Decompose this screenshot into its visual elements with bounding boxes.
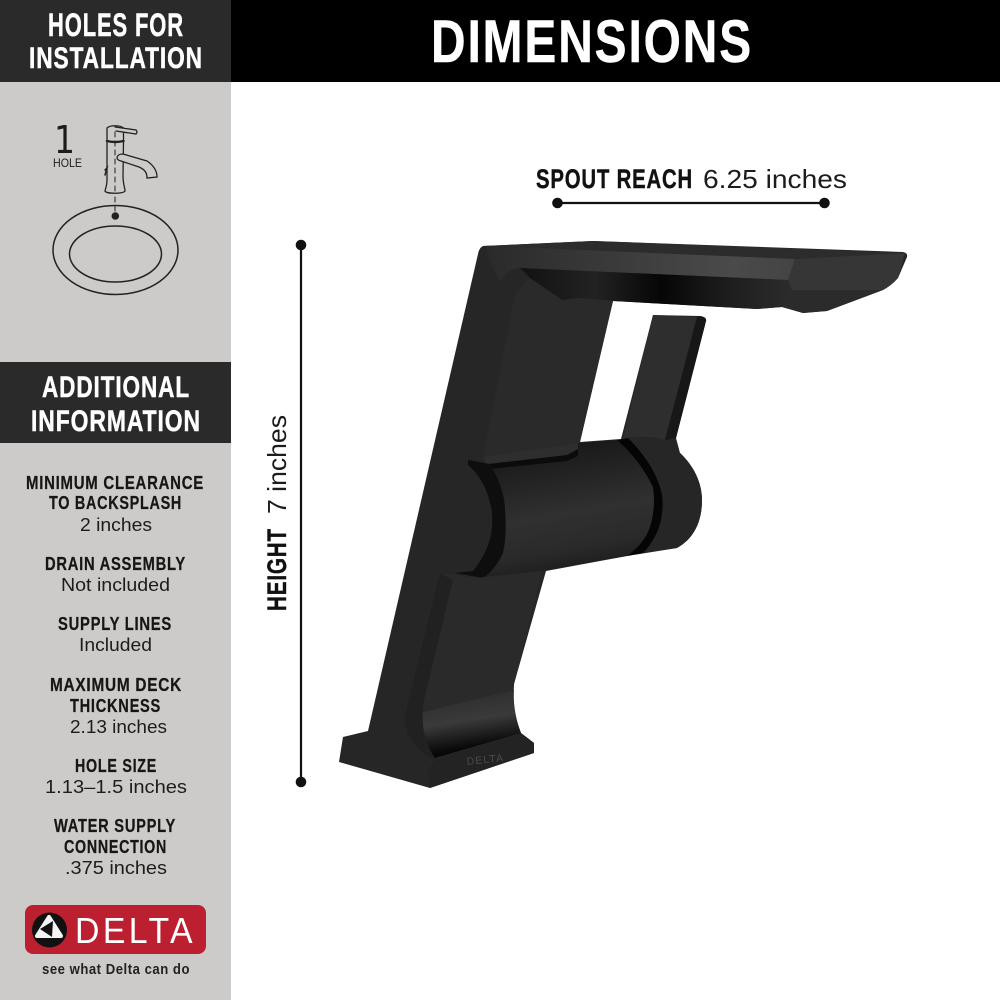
spec: maximum deck thickness (50, 675, 182, 737)
mixer body (483, 440, 654, 578)
spec: minimum clearance (26, 473, 204, 535)
mounting hole (112, 212, 119, 220)
spec: hole size: HOLE SIZE (75, 756, 157, 776)
logo: Delta: see what Delta can do (42, 961, 190, 978)
spec: hole size (45, 756, 187, 797)
dimension: height (262, 240, 306, 787)
height arrow (296, 240, 306, 787)
lever (623, 315, 697, 440)
faucet product image (339, 241, 907, 788)
spec: water supply connection: WATER SUPPLY (54, 816, 176, 836)
heading: additional information (0, 362, 231, 443)
dimension: height: 7 inches (262, 415, 292, 514)
base plate front (428, 733, 534, 788)
base logo: DELTA (466, 752, 505, 768)
spec: drain assembly: Not included (61, 575, 170, 595)
dimension: spout reach (536, 164, 847, 208)
lower column panel (405, 571, 542, 735)
faucet line drawing (105, 126, 157, 212)
logo: Delta: DELTA (75, 910, 196, 951)
spout end face (788, 253, 905, 290)
base recess (423, 690, 521, 758)
panel ledge (483, 443, 578, 470)
logo mark (32, 912, 67, 948)
heading: holes for installation: INSTALLATION (29, 42, 203, 75)
heading: additional information: ADDITIONAL (42, 371, 190, 404)
logo: Delta (25, 905, 206, 978)
title: DIMENSIONS (431, 8, 753, 75)
heading: holes for installation (0, 0, 231, 82)
hole count: 1 (54, 118, 75, 162)
dimension: height: HEIGHT (262, 528, 292, 611)
spec: supply lines: Included (79, 635, 152, 655)
dimension: spout reach: 6.25 inches (703, 164, 847, 194)
sink outline (53, 206, 178, 294)
spec: minimum clearance: 2 inches (80, 515, 152, 535)
spout front strip (486, 246, 795, 282)
spec: maximum deck thickness: MAXIMUM DECK (50, 675, 182, 695)
body collar (455, 460, 506, 578)
spec: water supply connection: .375 inches (65, 858, 167, 878)
hole count: HOLE (53, 156, 82, 170)
spout reach arrow (552, 198, 830, 208)
spec: water supply connection: CONNECTION (64, 837, 167, 857)
faucet silhouette (339, 241, 907, 788)
spec: minimum clearance: TO BACKSPLASH (49, 493, 182, 513)
spec: maximum deck thickness: 2.13 inches (70, 717, 167, 737)
spec: water supply connection (54, 816, 176, 878)
icon: one hole faucet and sink (53, 118, 178, 294)
spec: maximum deck thickness: THICKNESS (70, 696, 161, 716)
knob cap (628, 437, 702, 553)
dimension: spout reach: SPOUT REACH (536, 164, 693, 194)
sidebar panel (0, 82, 231, 1000)
heading: holes for installation: HOLES FOR (48, 7, 184, 43)
spout underside (520, 268, 792, 309)
knob groove (617, 438, 663, 556)
spout nose underside (782, 290, 883, 313)
heading: additional information: INFORMATION (31, 405, 201, 438)
spec: hole size: 1.13–1.5 inches (45, 777, 187, 797)
spout top surface (483, 241, 905, 259)
spec: drain assembly (45, 554, 186, 595)
spec: drain assembly: DRAIN ASSEMBLY (45, 554, 186, 574)
lower panel inner bevel (405, 573, 453, 760)
spec: supply lines (58, 614, 172, 655)
ledge shadow (488, 449, 578, 470)
title bar (231, 0, 1000, 82)
spec: supply lines: SUPPLY LINES (58, 614, 172, 634)
upper inner panel (483, 278, 613, 468)
spec: minimum clearance: MINIMUM CLEARANCE (26, 473, 204, 493)
